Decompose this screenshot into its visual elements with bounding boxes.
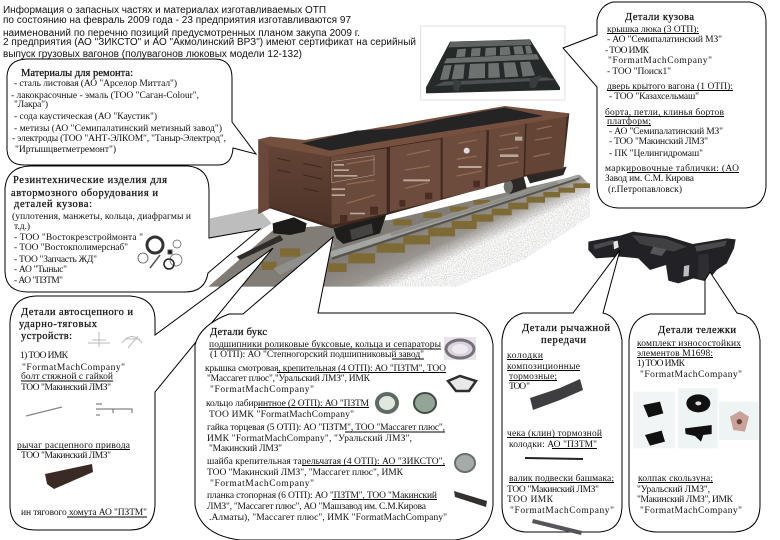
heading: rubber products: деталей кузова:: [14, 199, 92, 210]
text: body parts items: - ТОО "Поиск1": [607, 67, 671, 77]
image: bogie: [588, 232, 736, 283]
text: materials list: - метизы (АО "Семипалатинский метизный завод"): [14, 123, 222, 134]
text: autocoupler suppliers: болт стяжной с гайкой: [21, 371, 113, 382]
text: brake linkage items: [507, 351, 614, 516]
text: brake linkage items: чека (клин) тормозной: [507, 428, 602, 439]
text: body parts items: платформ;: [607, 116, 651, 127]
text: materials list: "Иртышцветметремонт"): [15, 144, 116, 155]
text: brake linkage items: валик подвески башмака;: [509, 473, 614, 484]
icon: washer: [455, 454, 475, 472]
icon: locking plate: [454, 491, 487, 507]
text: axle box items: подшипники роликовые буксовые, кольца и сепараторы: [209, 339, 442, 350]
text: materials list: - сталь листовая (АО "Арселор Миттал"): [14, 78, 177, 89]
heading: autocoupler: устройств:: [21, 331, 72, 342]
heading: axle box: Детали букс: [210, 327, 267, 338]
text: body parts items: - ТОО "Казахсельмаш": [609, 92, 699, 102]
image: wear-resistant parts photos: [633, 388, 758, 448]
text: body parts items: борта, петли, клинья бортов: [605, 107, 724, 118]
heading: materials: Материалы для ремонта:: [21, 68, 133, 79]
heading: bogie: Детали тележки: [658, 325, 736, 336]
text: bogie items: "FormatMachCompany": [640, 506, 742, 516]
text: bogie items: [637, 338, 742, 516]
text: brake linkage items: колодки: [507, 351, 543, 361]
text: autocoupler suppliers: ТОО "Макинский ЛМЗ": [21, 450, 111, 461]
text: body parts items: - ТОО "Макинский ЛМЗ": [609, 136, 708, 147]
icon: brake pin: [525, 458, 583, 459]
heading: autocoupler: ударно-тяговых: [19, 319, 98, 330]
text: axle box items: "FormatMachCompany": [210, 479, 314, 489]
text: bogie items: "FormatMachCompany": [640, 370, 742, 380]
text: materials list: - лакокрасочные - эмаль (ТОО "Саган-Colour",: [11, 90, 199, 101]
text: rubber products list: - АО "Тыныс": [14, 265, 67, 275]
text: bogie items: колпак скользуна;: [638, 474, 713, 484]
icon: brake shoe: [530, 379, 583, 410]
icon: bearing: [444, 337, 476, 360]
text: rubber products list: - ТОО "Востокполимерснаб": [14, 242, 128, 253]
title: information paragraph: [3, 4, 416, 60]
text: rubber products list: [12, 211, 191, 286]
text: bogie items: "Макинский ЛМЗ", ИМК: [637, 494, 734, 505]
text: brake linkage items: тормозные;: [509, 372, 557, 382]
text: axle box items: гайка торцевая (5 ОТП): АО "ПЗТМ", ТОО "Массагет плюс",: [207, 422, 445, 433]
text: materials list: "Лакра"): [14, 99, 48, 110]
heading: autocoupler: [19, 307, 133, 342]
heading: rubber products: Резинтехнические изделия для: [13, 175, 167, 186]
icon: rubber rings: [138, 237, 182, 269]
callout: body parts: [563, 2, 766, 208]
text: bogie items: комплект износостойких: [637, 338, 741, 349]
title: information paragraph: 2 предприятия (АО "ЗИКСТО" и АО "Акмолинский ВРЗ") имеют сертификат на серийный: [3, 36, 416, 48]
text: axle box items: (1 ОТП): АО "Степногорский подшипниковый завод": [210, 349, 424, 360]
text: materials list: - электроды (ТОО "АНТ-ЭЛКОМ", "Таныр-Электрод",: [12, 133, 226, 144]
text: bogie items: элементов М1698:: [637, 349, 713, 359]
heading: brake linkage: [522, 323, 610, 346]
text: axle box items: ЛМЗ", "Массагет плюс", АО "Машзавод им. С.М.Кирова: [207, 502, 427, 512]
text: bogie items: "Уральский ЛМЗ",: [637, 484, 710, 495]
icon: bracket: [96, 404, 132, 415]
callout: rubber products: [5, 166, 260, 292]
text: materials list: [11, 78, 226, 155]
text: body parts items: - ПК "Целингидромаш": [609, 149, 703, 159]
icon: coupler parts: [88, 332, 142, 348]
text: body parts items: "FormatMachCompany": [608, 56, 712, 66]
text: axle box items: ИМК "FormatMachCompany", "Уральский ЛМЗ",: [207, 433, 412, 444]
text: brake linkage items: композиционные: [507, 362, 580, 372]
heading: rubber products: автормозного оборудования и: [11, 188, 158, 199]
text: brake linkage items: колодки: АО "ПЗТМ": [509, 440, 597, 450]
text: bogie items: 1) ТОО ИМК: [637, 358, 686, 369]
text: body parts items: - ТОО ИМК: [605, 46, 650, 56]
callout: bogie parts: [629, 272, 760, 532]
text: axle box items: "FormatMachCompany": [210, 385, 314, 395]
text: rubber products list: т.д.): [14, 221, 30, 232]
text: axle box items: шайба крепительная тарельчатая (4 ОТП): АО "ЗИКСТО",: [207, 456, 445, 467]
callout: autocoupler parts: [10, 248, 273, 530]
text: body parts items: (г.Петропавловск): [608, 184, 682, 195]
title: information paragraph: наименований по перечню позиций предусмотренных планом закупа 2009 г.: [3, 28, 360, 39]
heading: rubber products: [11, 175, 167, 210]
text: autocoupler suppliers: ин тягового хомута АО "ПЗТМ": [21, 508, 147, 518]
text: axle box items: .Алматы), "Массагет плюс", ИМК "FormatMachCompany": [209, 512, 447, 523]
text: axle box items: ТОО "Макинский ЛМЗ", "Массагет плюс", ИМК: [207, 467, 404, 478]
text: autocoupler suppliers: рычаг расцепного привода: [17, 441, 131, 451]
text: axle box items: планка стопорная (6 ОТП): АО "ПЗТМ", ТОО "Макинский: [207, 490, 437, 501]
image: wagon hatch cover: [421, 26, 565, 100]
heading: brake linkage: передачи: [541, 335, 586, 346]
text: axle box items: "Массагет плюс","Уральский ЛМЗ", ИМК: [207, 373, 371, 384]
text: rubber products list: - ТОО "Востокрезстроймонта ": [14, 232, 143, 243]
text: brake linkage items: ТОО "Макинский ЛМЗ": [507, 484, 599, 495]
heading: body parts: Детали кузова: [625, 12, 694, 23]
illustration: freight gondola wagon on track: [208, 106, 590, 287]
text: rubber products list: - АО "ПЗТМ": [14, 276, 63, 286]
icon: labyrinth ring cover: [414, 393, 436, 413]
callout: materials for repair: [7, 59, 256, 165]
text: body parts items: Завод им. С.М. Кирова: [605, 174, 695, 184]
text: body parts items: маркировочные таблички: (АО: [605, 163, 739, 174]
text: brake linkage items: "FormatMachCompany": [510, 506, 614, 516]
text: axle box items: [205, 339, 447, 523]
text: brake linkage items: ТОО ИМК: [507, 495, 554, 505]
icon: labyrinth ring: [377, 394, 397, 412]
text: axle box items: крышка смотровая, крепительная (4 ОТП): АО "ПЗТМ", ТОО: [205, 363, 446, 374]
title: information paragraph: Информация о запасных частях и материалах изготавливаемых ОТП: [3, 4, 326, 16]
text: body parts items: - АО "Семипалатинский МЗ": [607, 34, 722, 45]
text: body parts items: [605, 24, 739, 195]
title: information paragraph: по состоянию на февраль 2009 года - 23 предприятия изготавливаются 97: [3, 14, 351, 26]
text: rubber products list: - ТОО "Запчасть ЖД": [14, 255, 97, 265]
callout: axle box parts: [195, 237, 493, 540]
text: body parts items: крышка люка (3 ОТП):: [607, 24, 699, 35]
text: autocoupler suppliers: 1) ТОО ИМК: [20, 350, 69, 361]
text: materials list: - сода каустическая (АО "Каустик"): [14, 111, 157, 122]
icon: suspension pin: [532, 519, 582, 535]
icon: bolt: [26, 407, 62, 416]
text: body parts items: дверь крытого вагона (1 ОТП):: [607, 81, 733, 92]
text: axle box items: ТОО ИМК "FormatMachCompany": [209, 410, 354, 420]
title: information paragraph: выпуск грузовых вагонов (полувагонов люковых модели 12-132): [3, 49, 302, 60]
text: rubber products list: (уплотения, манжеты, кольца, диафрагмы и: [12, 211, 191, 222]
text: autocoupler suppliers: ТОО "Макинский ЛМЗ": [21, 382, 111, 393]
icon: inspection cover: [448, 376, 476, 391]
icon: lever: [45, 464, 93, 489]
text: autocoupler suppliers: "FormatMachCompany": [22, 363, 125, 373]
text: axle box items: кольцо лабиринтное (2 ОТП): АО "ПЗТМ: [206, 398, 370, 409]
text: brake linkage items: ТОО ": [509, 382, 530, 392]
text: body parts items: - АО "Семипалатинский МЗ": [609, 126, 723, 137]
heading: brake linkage: Детали рычажной: [522, 323, 610, 334]
callout: brake linkage parts: [502, 250, 622, 535]
text: axle box items: "Макинский ЛМЗ": [209, 443, 282, 454]
text: autocoupler suppliers: [17, 350, 147, 518]
heading: autocoupler: Детали автосцепного и: [21, 307, 133, 318]
